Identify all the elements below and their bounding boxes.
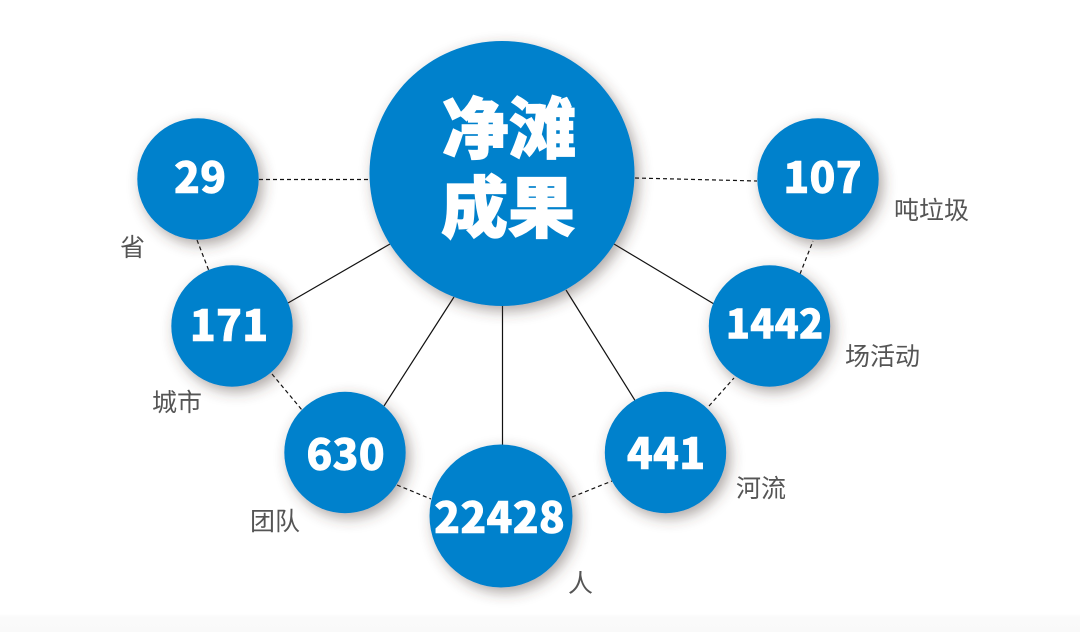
node: 1442 events: 1442 — [726, 292, 823, 350]
node: 1442 events — [709, 265, 830, 387]
node: 630 teams: 630 — [306, 421, 385, 483]
node: 171 cities — [171, 265, 293, 387]
connector lines: dashed ring — [197, 178, 813, 499]
central circle: title: 成果 — [441, 172, 575, 247]
node: 107 tons of trash — [757, 118, 879, 240]
label: events: 场活动 — [845, 343, 920, 371]
node: 441 rivers — [605, 392, 726, 513]
label: tons of trash: 吨垃圾 — [894, 197, 969, 225]
node: 29 provinces: 29 — [174, 144, 226, 206]
node: 107 tons of trash: 107 — [783, 144, 862, 206]
label: people: 人 — [568, 570, 593, 598]
connector lines: solid spokes — [288, 244, 714, 446]
node: 171 cities: 171 — [190, 292, 268, 354]
label: provinces: 省 — [120, 234, 145, 262]
node: 22428 people — [430, 444, 572, 588]
central circle: title: 净滩 — [442, 93, 576, 168]
node: 441 rivers: 441 — [627, 420, 705, 482]
label: teams: 团队 — [250, 508, 300, 536]
node: 22428 people: 22428 — [434, 484, 565, 546]
node: 29 provinces — [137, 118, 259, 240]
central circle: title — [370, 41, 634, 306]
node: 630 teams — [284, 392, 406, 513]
label: rivers: 河流 — [736, 475, 786, 503]
label: cities: 城市 — [152, 389, 202, 417]
